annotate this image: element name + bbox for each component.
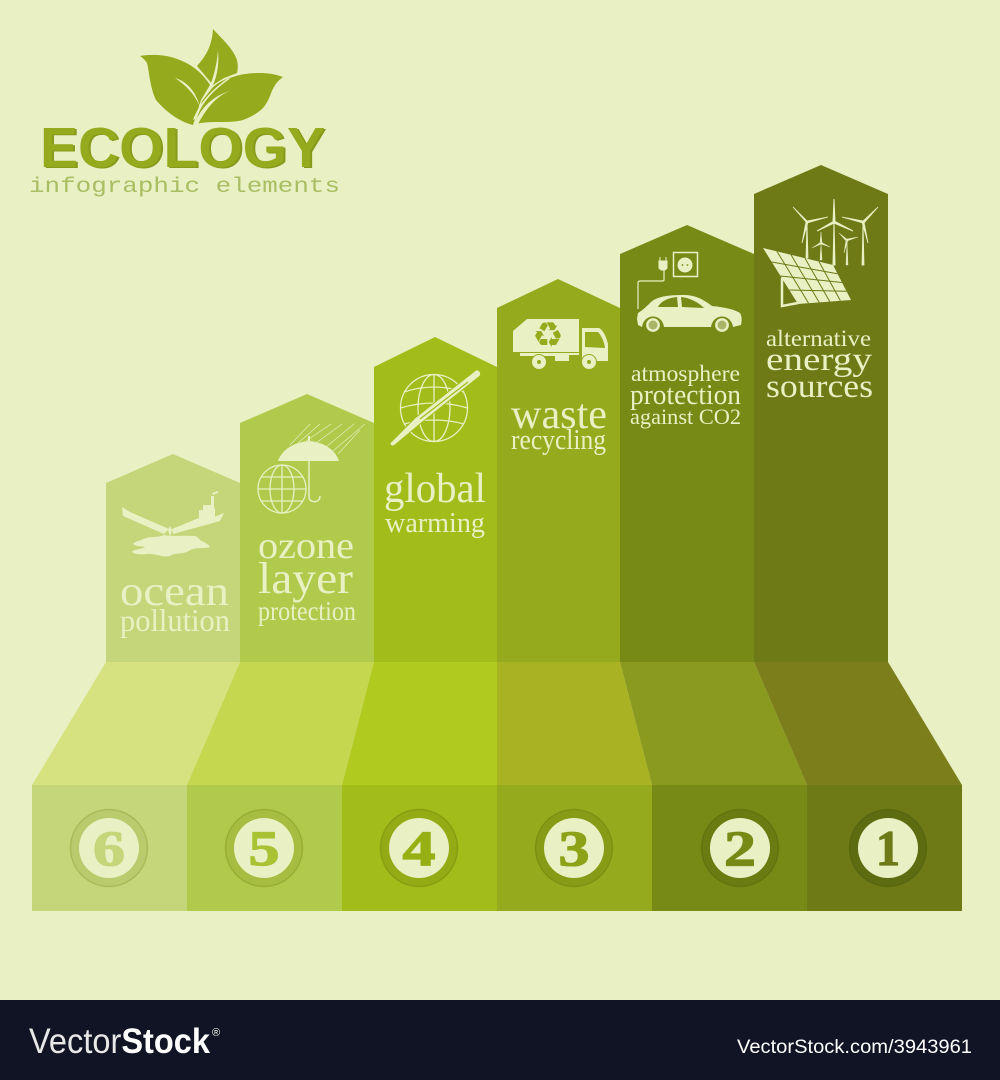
icon: electric car charging [637,252,742,332]
heading line 2: layer [258,554,353,603]
perspective floor [754,662,962,785]
base [807,785,962,911]
heading: alternative [766,326,871,351]
subheading: against CO2 [630,404,741,429]
upper column [497,279,620,662]
subheading: warming [385,508,485,539]
base [342,785,497,911]
heading: ozone [258,525,354,567]
upper column [106,454,240,662]
number badge [380,810,458,886]
registered mark: ® [212,1027,220,1039]
icon: globe with thermometer [390,370,481,446]
icon: umbrella and globe [258,424,365,513]
subheading: recycling [511,425,606,456]
subheading: protection [258,596,356,626]
base [497,785,652,911]
footer: watermark bar [0,1000,1000,1080]
icon: wind turbines and solar panel [763,199,878,306]
perspective floor [620,662,807,785]
perspective floor [342,662,497,785]
number badge: 5 [248,820,280,876]
number badge [226,810,302,886]
number badge: 4 [402,820,436,876]
icon: recycling truck [513,316,608,370]
panel: step 4 global warming [342,337,497,911]
subtitle: infographic elements [29,176,340,199]
base [32,785,187,911]
upper column [240,394,374,662]
icon: leaves [140,29,283,137]
panel: step 5 ozone layer protection [187,394,374,911]
base [652,785,807,911]
number badge: 3 [558,820,590,876]
title: ECOLOGY [40,116,325,180]
heading: waste [511,392,607,438]
upper column [620,225,754,662]
icon: recycling truck: ♻ [532,316,564,356]
icon: broken oil tanker and slick [122,491,224,556]
title: ECOLOGY [42,117,327,181]
heading: atmosphere [631,361,740,386]
number badge: 6 [93,820,125,876]
number badge [70,810,148,886]
heading line 3: sources [766,369,873,405]
panel: step 3 waste recycling [497,279,652,911]
heading line 2: energy [766,342,873,378]
number badge [536,810,612,886]
number badge: 2 [724,820,756,876]
number badge [702,810,778,886]
number badge: 1 [876,820,900,876]
panel: step 2 atmosphere protection [620,225,807,911]
perspective floor [32,662,240,785]
perspective floor [497,662,652,785]
heading line 2: protection [630,379,741,411]
brand logo text: VectorStock [29,1022,210,1061]
leaf veins [175,50,237,137]
image url: VectorStock.com/3943961 [737,1037,972,1058]
base [187,785,342,911]
subheading: pollution [120,602,230,638]
heading: ocean [120,569,229,615]
panel: step 1 alternative energy sources [754,165,962,911]
upper column [754,165,888,662]
panel: step 6 ocean pollution [32,454,240,911]
heading: global [384,466,486,512]
number badge [850,810,926,886]
logo: ecology [29,29,340,199]
perspective floor [187,662,374,785]
upper column [374,337,497,662]
